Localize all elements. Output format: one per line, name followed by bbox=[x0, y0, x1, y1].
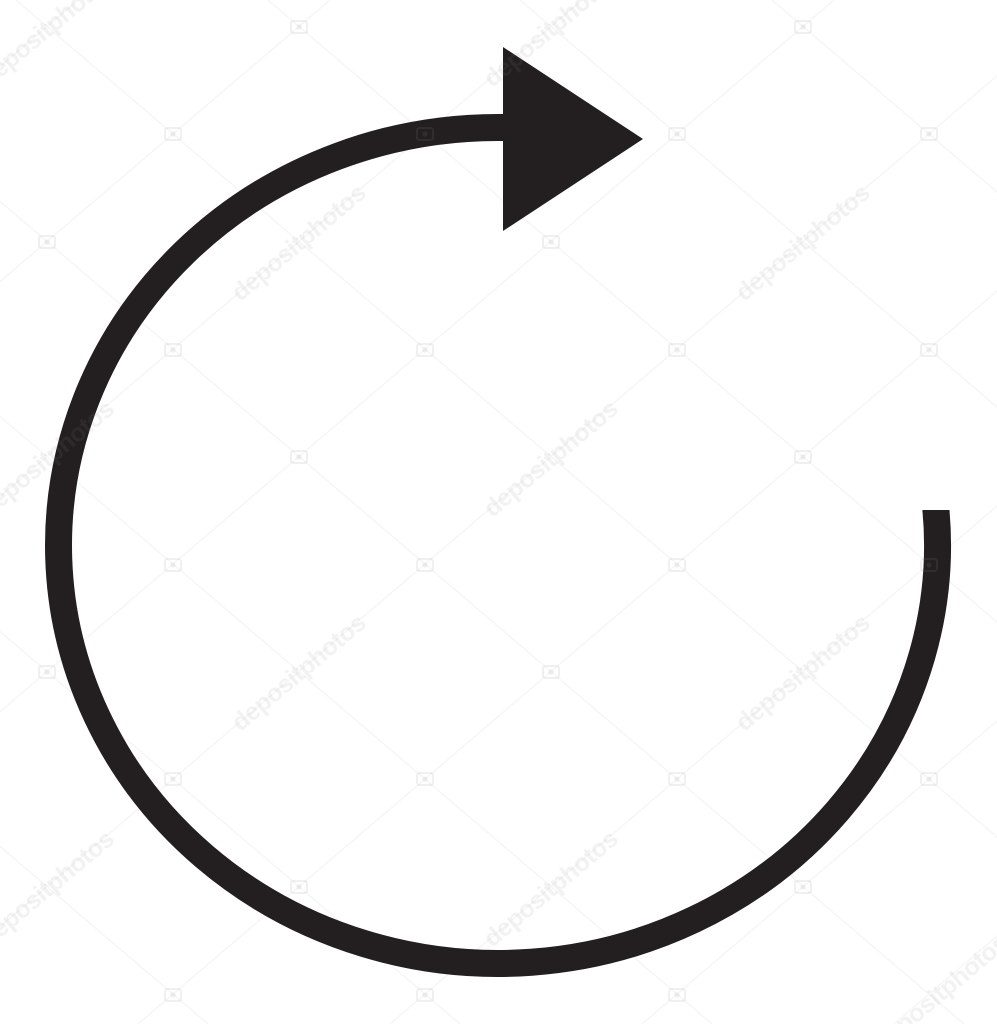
arrow: circular clockwise arc with triangular head bbox=[59, 47, 938, 963]
watermark text: depositphotos bbox=[730, 609, 875, 737]
watermark text: depositphotos bbox=[478, 395, 623, 523]
watermark text: depositphotos bbox=[226, 179, 371, 307]
arrowhead bbox=[503, 47, 643, 231]
arc shaft bbox=[59, 127, 938, 963]
watermark text: depositphotos bbox=[730, 179, 875, 307]
watermark text: depositphotos bbox=[226, 609, 371, 737]
watermark text: depositphotos bbox=[478, 825, 623, 953]
